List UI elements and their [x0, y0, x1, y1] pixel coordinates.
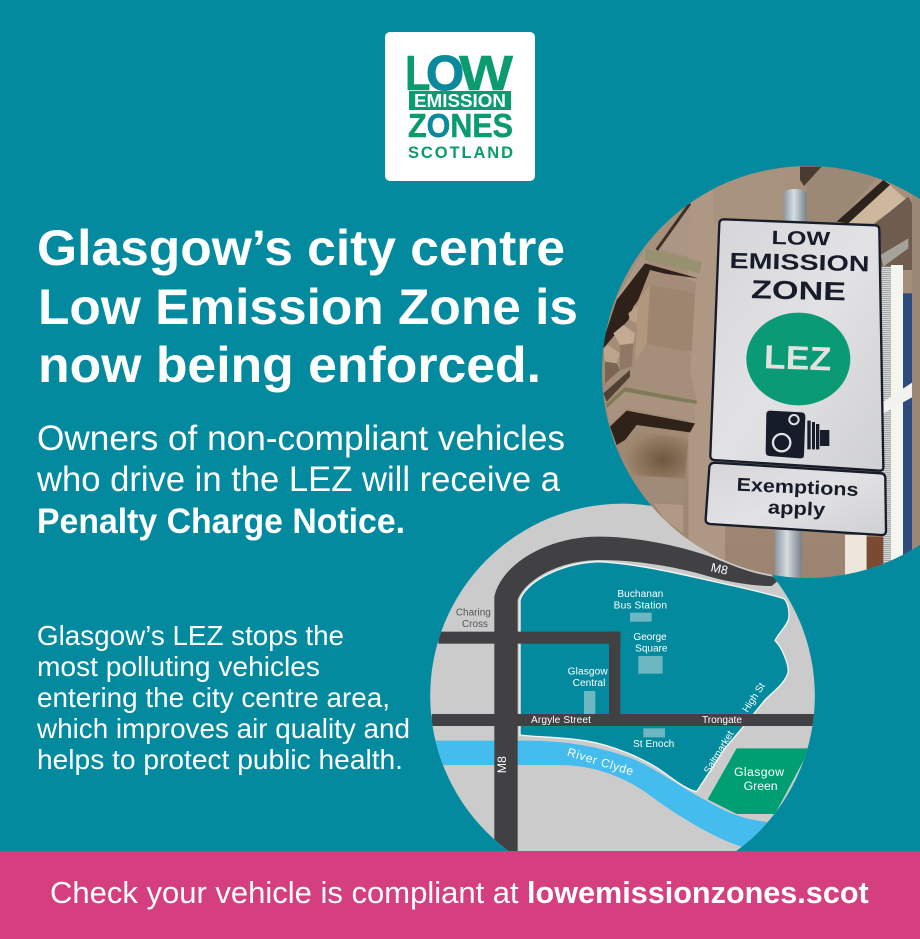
explanation text — [36, 620, 410, 775]
logo: L — [405, 46, 430, 101]
photo: sign plate — [706, 219, 886, 535]
map: charing cross label: Cross — [462, 619, 488, 630]
call to action banner: Check your vehicle is compliant at — [50, 875, 519, 910]
photo: sign plate: EMISSION — [729, 248, 870, 276]
explanation text: Glasgow’s LEZ stops the — [37, 620, 344, 651]
logo: SCOTLAND — [408, 144, 513, 162]
map: white labels — [495, 560, 768, 778]
map: white labels: St Enoch — [633, 739, 674, 750]
explanation text: helps to protect public health. — [37, 744, 403, 775]
map: white labels: Saltmarket — [702, 729, 736, 776]
photo: camera icon — [766, 411, 829, 458]
map: white labels: Square — [635, 644, 668, 655]
logo: EMISSION — [414, 91, 506, 111]
logo: ZONES — [408, 107, 513, 144]
main heading: Low Emission Zone is — [38, 279, 578, 335]
explanation text: entering the city centre area, — [37, 682, 390, 713]
photo: low emission zone street sign — [600, 160, 920, 580]
map: glasgow green — [708, 748, 810, 814]
penalty notice text: who drive in the LEZ will receive a — [36, 460, 560, 499]
map: white labels: Central — [573, 678, 605, 689]
logo: O — [426, 47, 464, 101]
photo: sign plate: LEZ — [763, 339, 832, 379]
logo: W — [459, 47, 514, 101]
main heading: now being enforced. — [38, 337, 541, 393]
map: landmark squares — [584, 613, 665, 737]
map: roads — [432, 537, 814, 853]
call to action banner — [0, 851, 920, 939]
explanation text: which improves air quality and — [36, 713, 410, 744]
map: white labels: River Clyde — [566, 745, 635, 778]
map: low emission zone area — [520, 562, 789, 792]
map: white labels: Trongate — [702, 715, 742, 726]
map: charing cross label — [456, 608, 490, 627]
map: white labels: Bus Station — [614, 601, 667, 612]
map: white labels: Buchanan — [617, 589, 663, 600]
photo: sandstone building — [600, 160, 920, 580]
photo: sign pole — [775, 189, 807, 580]
map: river clyde — [432, 741, 778, 847]
main heading — [37, 220, 578, 393]
map: glasgow green: Green — [744, 779, 778, 793]
photo: sign plate: apply — [768, 496, 826, 520]
penalty notice text: Penalty Charge Notice. — [37, 502, 405, 541]
call to action banner: lowemissionzones.scot — [527, 876, 869, 910]
map — [430, 504, 815, 851]
photo: window — [845, 265, 912, 580]
photo: sign plate: LOW — [771, 228, 831, 250]
logo — [385, 32, 535, 181]
map: white labels: Glasgow — [568, 667, 608, 678]
photo: sign plate: Exemptions — [736, 474, 859, 500]
map: white labels: M8 — [709, 560, 729, 578]
penalty notice text: Owners of non-compliant vehicles — [37, 419, 565, 458]
map: white labels: High St — [741, 681, 768, 715]
map: charing cross label: Charing — [456, 607, 491, 618]
map: white labels: Argyle Street — [531, 715, 591, 726]
penalty notice text — [36, 419, 565, 541]
explanation text: most polluting vehicles — [37, 651, 320, 682]
main heading: Glasgow’s city centre — [37, 220, 565, 276]
map: white labels: M8 — [495, 756, 509, 773]
map: white labels: George — [633, 632, 667, 643]
photo: sign plate: ZONE — [751, 274, 846, 306]
map: glasgow green: Glasgow — [734, 765, 784, 779]
